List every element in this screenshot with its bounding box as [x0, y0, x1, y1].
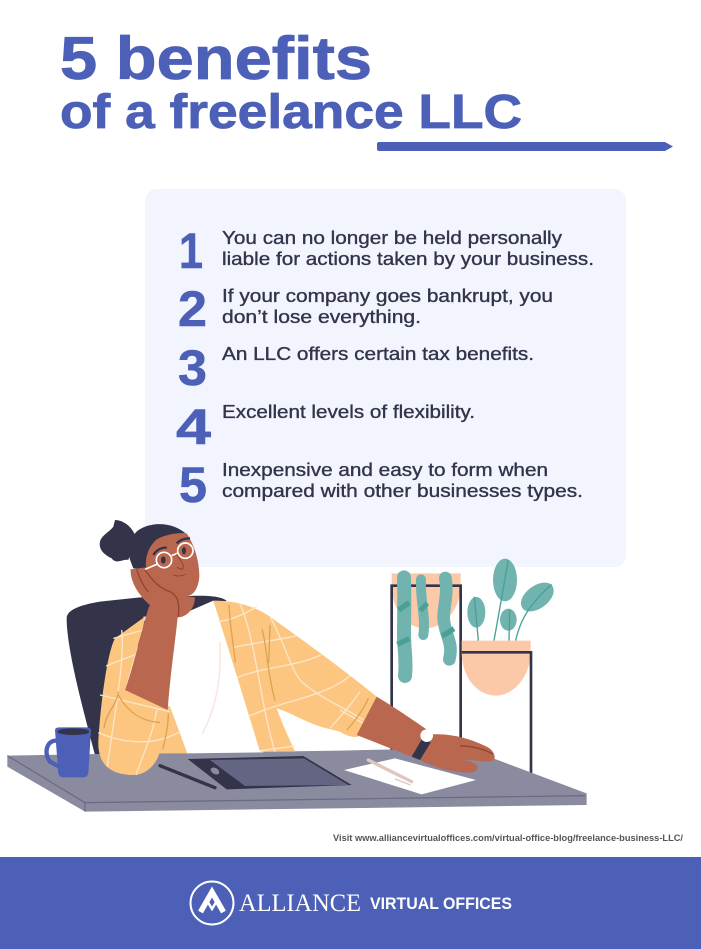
- benefit 1: 1: [179, 223, 203, 279]
- title: of a freelance LLC: [60, 86, 522, 139]
- source link: Visit www.alliancevirtualoffices.com/virtual-office-blog/freelance-business-LLC/: [333, 833, 683, 844]
- benefit 2: [178, 281, 553, 337]
- left sleeve: [98, 617, 187, 775]
- logo mark: [190, 882, 234, 924]
- paper: [344, 758, 476, 794]
- glasses: [145, 543, 193, 569]
- face: [131, 533, 199, 605]
- benefit 3: An LLC offers certain tax benefits.: [222, 344, 534, 364]
- mug: [47, 727, 91, 777]
- left pot: [392, 573, 461, 628]
- right arm and hand: [357, 697, 495, 773]
- benefit 5: [179, 457, 583, 513]
- benefit 1: liable for actions taken by your business.: [222, 249, 594, 269]
- pencil: [368, 760, 412, 785]
- benefit 4: Excellent levels of flexibility.: [222, 402, 475, 422]
- logo wordmark: ALLIANCE: [239, 890, 361, 917]
- illustration: woman: [47, 520, 377, 777]
- right stand: [462, 652, 531, 777]
- benefit 5: Inexpensive and easy to form when: [222, 460, 548, 480]
- benefit 2: don’t lose everything.: [222, 307, 421, 327]
- panel: benefits background: [145, 189, 626, 567]
- logo: [190, 882, 512, 924]
- right sleeve: [213, 601, 377, 752]
- right plant leaves: [467, 559, 559, 641]
- list of benefits: [176, 223, 594, 513]
- benefit 5: compared with other businesses types.: [222, 481, 583, 501]
- benefit 2: If your company goes bankrupt, you: [222, 286, 553, 306]
- benefit 5: 5: [179, 457, 207, 513]
- left hanging leaves: [397, 577, 454, 676]
- benefit 3: [178, 340, 534, 396]
- title: [60, 25, 522, 139]
- desk: [7, 749, 587, 812]
- benefit 1: You can no longer be held personally: [222, 228, 562, 248]
- left stand: [392, 586, 461, 753]
- arm propping head: [125, 569, 195, 710]
- benefit 1: [179, 223, 594, 279]
- wristwatch: [412, 729, 433, 760]
- chair: [67, 596, 227, 757]
- eyes and eyebrows: [153, 538, 190, 564]
- benefit 4: 4: [176, 399, 211, 455]
- nose and smile: [173, 554, 186, 576]
- bun: [100, 520, 135, 561]
- pen: [160, 766, 215, 788]
- hair: [128, 524, 187, 569]
- shirt crease: [202, 642, 220, 734]
- benefit 2: 2: [178, 281, 207, 337]
- logo tagline: VIRTUAL OFFICES: [370, 894, 512, 913]
- tablet: [188, 756, 352, 789]
- illustration: plants on stands: [392, 559, 559, 777]
- right pot: [462, 641, 531, 696]
- benefit 3: 3: [178, 340, 207, 396]
- white top: [143, 601, 263, 753]
- title: 5 benefits: [60, 25, 372, 92]
- title underline arrow: [377, 142, 673, 151]
- benefit 4: [176, 399, 475, 455]
- footer band: [0, 857, 701, 949]
